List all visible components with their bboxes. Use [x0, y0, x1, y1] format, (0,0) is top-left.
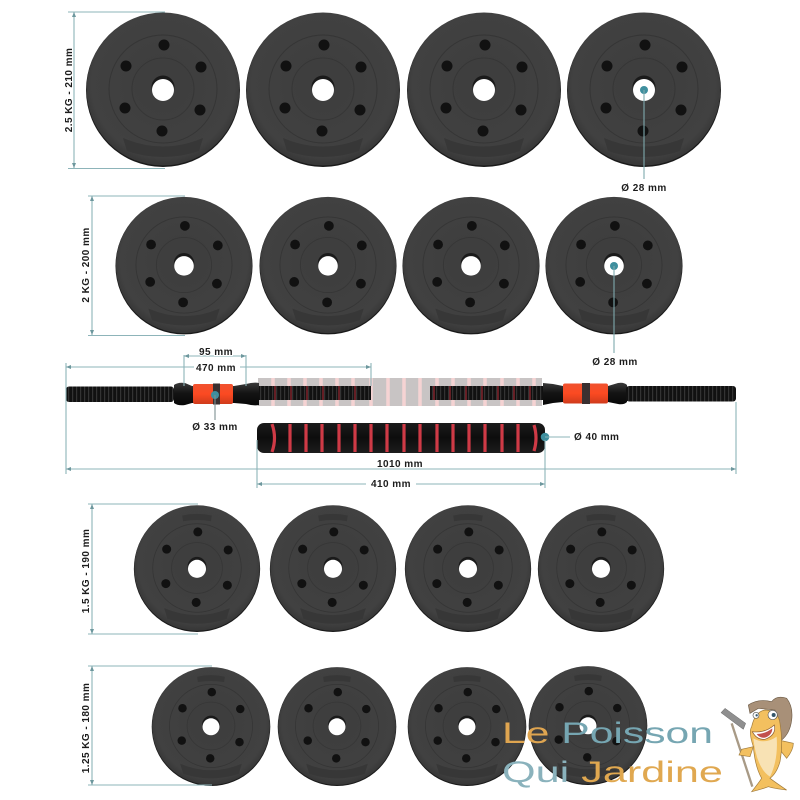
- row: 1.25 kg plates: [152, 666, 647, 786]
- dimension: 2.5 kg 210 mm: [64, 12, 165, 168]
- plate 1.25 kg 2: [278, 667, 396, 786]
- plate 1.5 kg 2: [270, 505, 396, 632]
- left threaded end: [66, 386, 174, 402]
- dimension: 95 mm: [184, 347, 246, 386]
- plate 1.5 kg 1: [134, 505, 260, 632]
- dimension: 1.25 kg 180 mm: [81, 666, 212, 785]
- plate 1.5 kg 3: [405, 505, 531, 632]
- left inner thread: [259, 386, 371, 400]
- right fin: [778, 740, 793, 758]
- left hand: [739, 747, 753, 757]
- callout: 40 mm sleeve: [541, 432, 619, 443]
- plate 2.5 kg 1: [86, 12, 240, 167]
- left collar: [174, 383, 259, 405]
- plate 1.25 kg 1: [152, 667, 270, 786]
- dimension: 1010 mm: 1010 mm: [377, 459, 423, 470]
- rake: [732, 723, 752, 787]
- row: 2 kg plates: [115, 197, 683, 334]
- callout: bore 28 mm on 2 kg plate: Ø 28 mm: [592, 357, 638, 368]
- dimension: 410 mm: [257, 440, 545, 490]
- plate 2 kg 2: [259, 197, 397, 334]
- plate 2.5 kg 4: [567, 12, 721, 167]
- callout: bore 28 mm on 2.5 kg plate: Ø 28 mm: [621, 183, 667, 194]
- logo line 1: Le Poisson: [502, 717, 713, 750]
- dimension: 2 kg 200 mm: [81, 196, 185, 336]
- left red grip: [193, 384, 233, 404]
- right red grip: [563, 384, 608, 404]
- hat: [748, 697, 792, 740]
- dimension: 2 kg 200 mm: 2 KG - 200 mm: [81, 227, 92, 303]
- bar with collars and ghosted sleeve: [66, 378, 736, 406]
- watermark logo text: [502, 717, 723, 789]
- plate 2 kg 3: [402, 197, 540, 334]
- eyes: [768, 710, 777, 720]
- ghost sleeve: [258, 378, 542, 406]
- icon: fish mascot with rake: [721, 697, 793, 792]
- dimension: 95 mm: 95 mm: [199, 347, 233, 358]
- foam grip sleeve: [257, 423, 545, 453]
- row: 1.5 kg plates: [134, 505, 664, 632]
- callout: bore 28 mm on 2 kg plate: [592, 262, 638, 368]
- plate 1.25 kg 4: [529, 666, 647, 785]
- row: 2.5 kg plates: [86, 12, 721, 167]
- right collar: [543, 383, 627, 405]
- dimension: 1.5 kg 190 mm: [81, 504, 198, 634]
- plate 2 kg 4: [545, 197, 683, 334]
- mouth: [752, 725, 775, 739]
- callout: bore 28 mm on 2.5 kg plate: [621, 86, 667, 194]
- logo line 2: Qui Jardine: [502, 756, 723, 789]
- plate 1.5 kg 4: [538, 505, 664, 632]
- callout: 33 mm collar: [192, 391, 238, 433]
- callout: 40 mm sleeve: Ø 40 mm: [574, 432, 619, 443]
- dimension: 410 mm: 410 mm: [371, 479, 411, 490]
- dimension: 1.5 kg 190 mm: 1.5 KG - 190 mm: [81, 529, 92, 613]
- right threaded end: [626, 386, 736, 402]
- dimension: 1.25 kg 180 mm: 1.25 KG - 180 mm: [81, 683, 92, 773]
- plate 2.5 kg 3: [407, 12, 561, 167]
- dimension: 2.5 kg 210 mm: 2.5 KG - 210 mm: [64, 48, 75, 132]
- plate 2.5 kg 2: [246, 12, 400, 167]
- body and tail: [750, 710, 787, 792]
- dimension: 470 mm: [66, 363, 371, 474]
- right inner thread: [430, 386, 543, 400]
- plate 1.25 kg 3: [408, 667, 526, 786]
- belly: [753, 737, 777, 777]
- plate 2 kg 1: [115, 197, 253, 334]
- dimension: 1010 mm: [66, 402, 736, 474]
- callout: 33 mm collar: Ø 33 mm: [192, 422, 238, 433]
- dimension: 470 mm: 470 mm: [196, 363, 236, 374]
